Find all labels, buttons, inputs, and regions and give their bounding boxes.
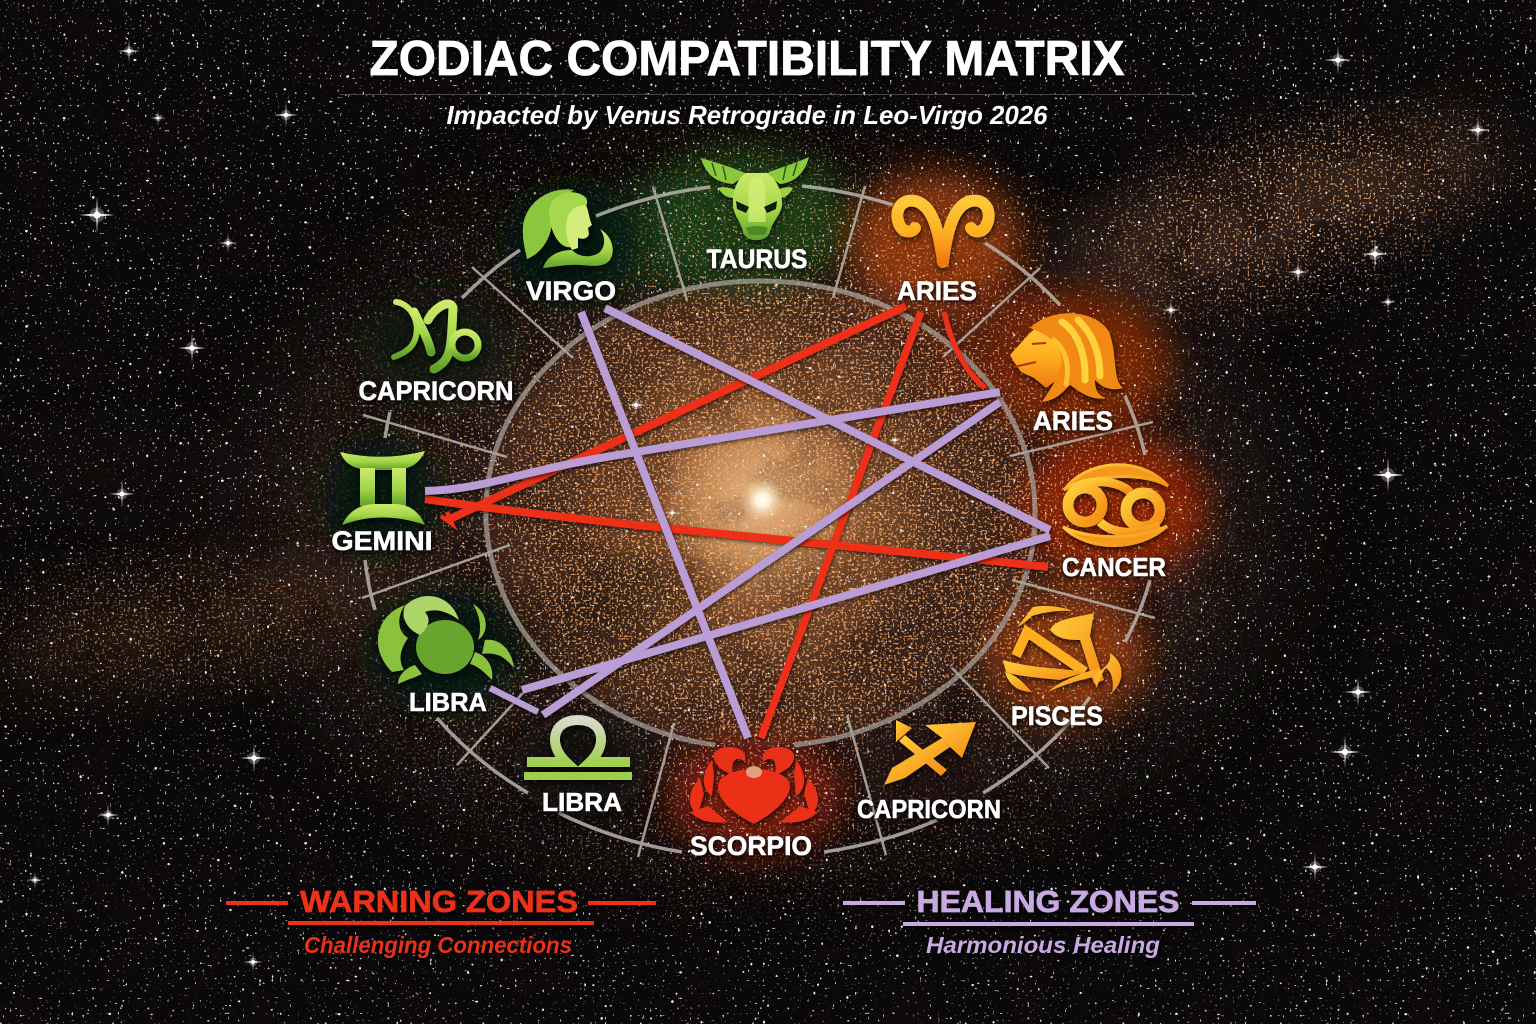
icon: sagittarius arrow [884,720,976,785]
legend: warning zones: WARNING ZONES [300,884,578,919]
dark halos behind green icons [322,185,998,818]
compatibility lines: warning red [425,306,1048,738]
icon: taurus [701,157,809,240]
label: cancer: CANCER [1062,552,1166,582]
icon: capricorn [394,302,478,369]
icon: leo lion [1010,313,1123,402]
label: taurus: TAURUS [706,244,808,274]
icon: aries ram [897,201,989,262]
subtitle: Impacted by Venus Retrograde in Leo-Virgo 2026 [446,100,1048,130]
zodiac wheel rings and spokes [362,186,1155,857]
label: virgo: VIRGO [526,276,616,306]
legend: warning zones: Challenging Connections [304,932,572,958]
label: capricorn lower: CAPRICORN [857,794,1001,824]
icon: cancer [1063,465,1168,546]
legend: healing zones: HEALING ZONES [916,884,1180,919]
galactic core [740,478,784,522]
icon: green crab [378,596,514,684]
label: capricorn: CAPRICORN [358,376,514,406]
icon: gemini [340,451,425,525]
legend: healing zones: Harmonious Healing [926,932,1160,958]
label: libra scales: LIBRA [542,787,622,817]
compatibility lines: healing purple [425,308,1050,738]
legend: warning zones [226,884,656,958]
label: gemini: GEMINI [332,526,432,556]
icon: libra scales [524,720,632,780]
icon: scorpio crab [690,747,818,824]
label: libra crab: LIBRA [409,687,487,717]
label: pisces: PISCES [1011,701,1103,731]
icon: virgo [523,189,613,268]
label: aries top: ARIES [897,276,977,306]
legend: healing zones [843,884,1256,958]
central galaxy disc [488,284,1032,745]
label: scorpio: SCORPIO [690,831,812,861]
warm and taurus zone glows [580,148,1205,853]
label: aries right: ARIES [1033,406,1113,436]
icon: pisces [1003,606,1122,693]
title: ZODIAC COMPATIBILITY MATRIX [370,32,1125,86]
